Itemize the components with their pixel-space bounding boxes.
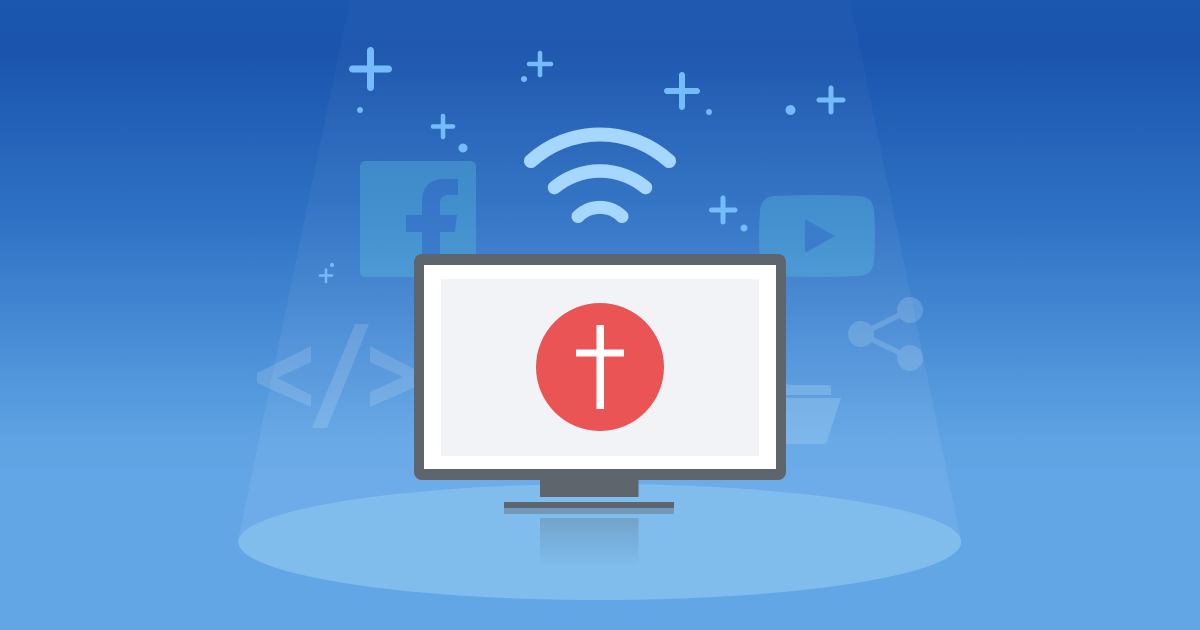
wifi symbol xyxy=(531,134,669,216)
monitor base xyxy=(504,502,674,508)
monitor frame xyxy=(414,254,786,480)
monitor xyxy=(414,254,786,566)
plus near youtube xyxy=(712,198,735,222)
sparkles xyxy=(320,50,843,282)
monitor screen xyxy=(424,265,776,469)
icon: folder xyxy=(780,378,841,444)
spotlight floor ellipse xyxy=(238,484,961,600)
icon: youtube xyxy=(759,195,875,277)
plus large xyxy=(352,50,388,88)
plus top right centre xyxy=(667,75,697,107)
plus small left xyxy=(320,270,332,282)
monitor neck xyxy=(540,478,638,497)
dots xyxy=(330,76,796,267)
icon: facebook xyxy=(360,161,476,277)
icon: code brackets xyxy=(257,324,420,428)
monitor stand reflection xyxy=(540,518,638,566)
plus top centre xyxy=(529,53,551,75)
spotlight beam xyxy=(238,0,961,541)
monitor base reflection xyxy=(504,508,674,514)
plus left xyxy=(433,116,453,137)
plus top right xyxy=(819,88,843,112)
red circle with cross xyxy=(536,303,664,431)
icon: share xyxy=(848,297,923,371)
screen panel xyxy=(441,279,759,456)
